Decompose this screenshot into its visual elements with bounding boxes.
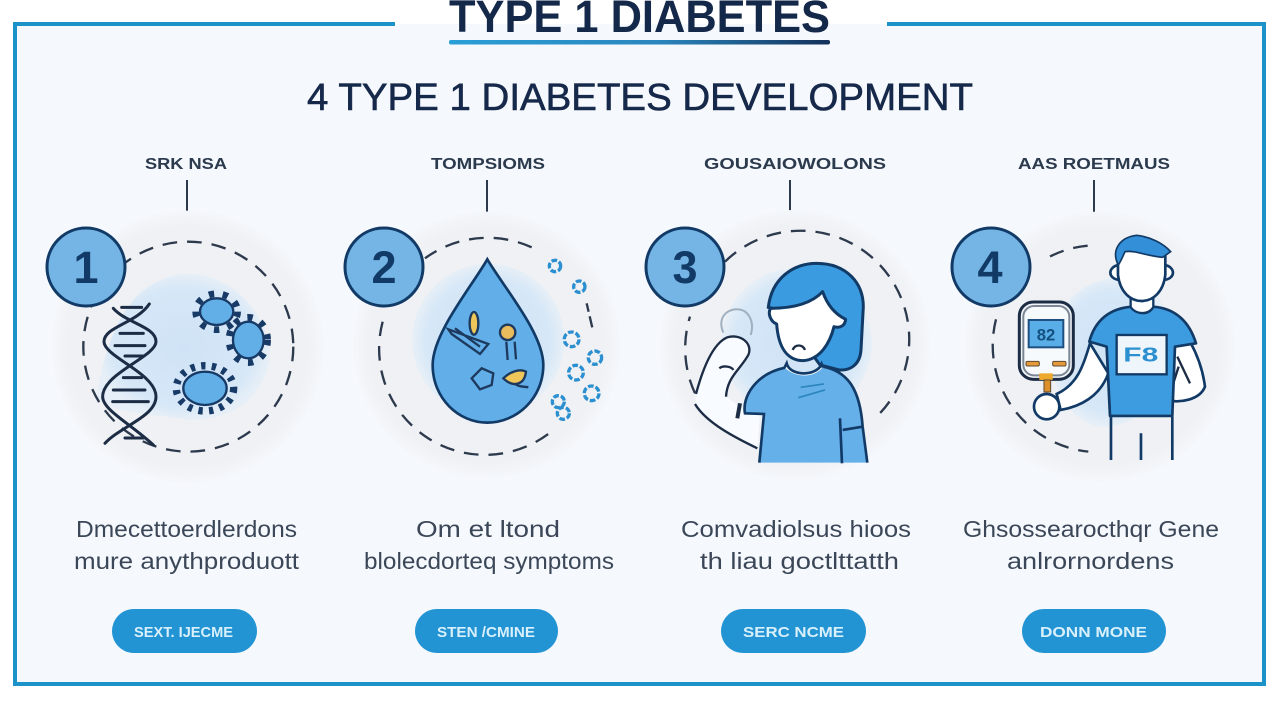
icon: collar: [783, 363, 824, 378]
stage 4 connector: [1093, 180, 1095, 238]
stage 2 heading: TOMPSIOMS: [431, 156, 545, 173]
stage 3 button: SERC NCME: [743, 624, 844, 641]
icon: neck: [1131, 295, 1153, 313]
right arm detail: [1173, 357, 1190, 383]
dash segment: [587, 303, 592, 328]
stage 3 description: th liau goctlttatth: [700, 548, 899, 574]
panel: stage 2: [345, 156, 620, 653]
icon: hair: [1116, 235, 1171, 265]
stage 3 button: [721, 609, 866, 653]
stage 4 number badge: [952, 228, 1030, 306]
stage 4 illustration: [965, 212, 1235, 482]
icon: right arm: [1165, 342, 1205, 401]
icon: face: [769, 292, 846, 361]
stage 4 number badge: 4: [977, 242, 1003, 293]
icon: raised arm: [695, 336, 760, 448]
panel: stage 4: [952, 156, 1235, 653]
stage 3 heading: GOUSAIOWOLONS: [704, 156, 886, 173]
subtitle: 4 TYPE 1 DIABETES DEVELOPMENT: [307, 77, 973, 119]
stage 2 illustration: [353, 212, 620, 478]
stage 1 illustration: [52, 211, 324, 483]
stage 1 description: Dmecettoerdlerdons: [76, 516, 297, 542]
stage 4 button: DONN MONE: [1040, 624, 1147, 641]
icon: cells in drop: [448, 312, 528, 389]
stage 1 number badge: [47, 228, 125, 306]
stage 1 button: SEXT. IJECME: [134, 624, 233, 641]
icon: mouth: [793, 345, 805, 350]
panel: stage 1: [47, 156, 324, 653]
icon: glucose meter: [1019, 302, 1073, 392]
stage 4 description: Ghsossearocthqr Gene: [963, 516, 1219, 542]
shirt fold: [798, 384, 825, 398]
icon: glucose meter: 82: [1037, 326, 1055, 345]
icon: shirt: [745, 367, 867, 463]
panel: stage 3: [646, 156, 930, 653]
stage 2 number badge: 2: [371, 242, 397, 293]
icon: faint symptom circle: [721, 309, 752, 335]
icon: hand: [1034, 394, 1059, 419]
shirt badge: [1117, 335, 1167, 374]
stage 1 description: mure anythproduott: [74, 548, 300, 574]
icon: ears: [1110, 265, 1173, 280]
icon: head: [1118, 250, 1165, 301]
stage 4 button: [1022, 609, 1166, 653]
stage 3 number badge: 3: [672, 242, 698, 293]
stage 4 description: anlrornordens: [1007, 548, 1174, 574]
stage 2 connector: [486, 180, 488, 234]
stage 1 heading: SRK NSA: [145, 156, 227, 173]
stage 2 button: [415, 609, 558, 653]
stage 4 description: [963, 516, 1219, 574]
icon: virus cells: [176, 294, 268, 411]
stage 2 number badge: [345, 228, 423, 306]
icon: DNA helix: [103, 304, 156, 445]
shirt badge: F8: [1123, 344, 1158, 367]
shirt outline: [745, 367, 867, 463]
stage 1 description: [74, 516, 300, 574]
stage 1 number badge: 1: [73, 242, 99, 293]
icon: shirt: [1089, 307, 1196, 416]
icon: blood drop: [433, 259, 543, 423]
stage 2 button: STEN /CMINE: [437, 624, 535, 641]
stage 1 connector: [186, 180, 188, 236]
stage 3 number badge: [646, 228, 724, 306]
stage 3 description: [681, 516, 911, 574]
stage 3 illustration: [660, 210, 930, 480]
icon: floating particles: [549, 260, 602, 419]
icon: hair: [768, 263, 863, 370]
stage 2 description: blolecdorteq symptoms: [364, 548, 614, 574]
stage 3 connector: [789, 180, 791, 234]
stage 3 description: Comvadiolsus hioos: [681, 516, 911, 542]
stage 2 description: [364, 516, 614, 574]
stage 4 heading: AAS ROETMAUS: [1018, 156, 1170, 173]
stage 2 description: Om et ltond: [416, 516, 560, 542]
icon: trousers: [1111, 417, 1172, 460]
icon: left arm: [1057, 343, 1108, 410]
stage 1 button: [112, 609, 257, 653]
title underline: [449, 40, 830, 44]
